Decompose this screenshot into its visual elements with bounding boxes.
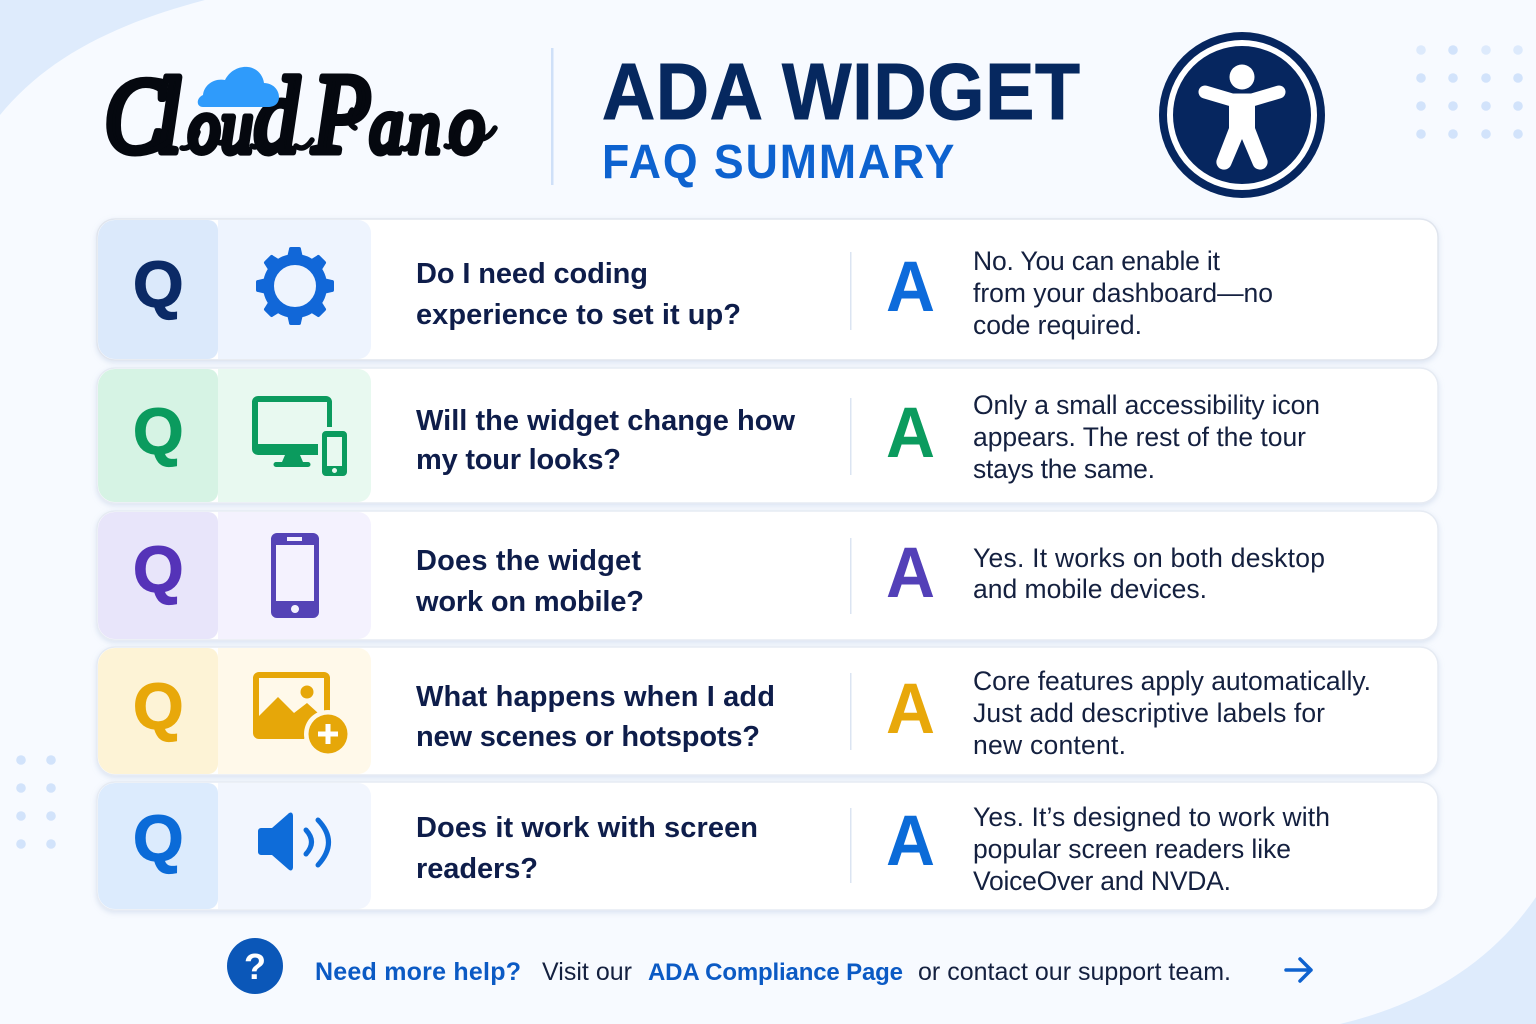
answer: Core features apply automatically. [973, 666, 1371, 696]
question [416, 405, 795, 476]
logo: CloudPano: u [221, 85, 253, 169]
title: ADA WIDGET [602, 47, 1080, 137]
answer: stays the same. [973, 454, 1155, 484]
icon: cloud [198, 67, 279, 107]
logo: CloudPano: o [188, 85, 220, 169]
panel: FAQ row 3 [97, 511, 1438, 640]
A badge: A [886, 248, 935, 327]
icon: mobile phone [271, 533, 319, 618]
icon: speaker [258, 813, 328, 870]
icon: gear [256, 247, 334, 325]
Q badge: Q [133, 802, 184, 874]
answer: VoiceOver and NVDA. [973, 866, 1231, 896]
answer [973, 543, 1325, 604]
A badge: A [886, 802, 935, 881]
logo: CloudPano [104, 50, 495, 177]
panel: FAQ row 1 [97, 219, 1438, 360]
A badge: A [886, 534, 935, 613]
footer [227, 938, 1311, 994]
icon: accessibility badge [1159, 32, 1325, 198]
Q badge: Q [133, 248, 184, 320]
question: Does the widget [416, 545, 641, 577]
answer: Just add descriptive labels for [973, 698, 1325, 728]
question: readers? [416, 853, 538, 885]
footer text: ADA Compliance Page [648, 959, 903, 986]
footer text: or contact our support team. [918, 958, 1231, 986]
logo: CloudPano: C [104, 56, 166, 176]
question: Will the widget change how [416, 405, 795, 437]
footer text [315, 958, 1231, 986]
panel: FAQ row 2 [97, 368, 1438, 503]
Q badge: Q [133, 670, 184, 742]
answer: Yes. It works on both desktop [973, 543, 1325, 573]
icon: help circle: ? [244, 946, 266, 987]
logo: CloudPano: n [408, 85, 440, 169]
footer text: Need more help? [315, 958, 521, 986]
answer [973, 390, 1320, 484]
subtitle: FAQ SUMMARY [602, 135, 955, 188]
Q badge: Q [133, 532, 184, 606]
question: work on mobile? [415, 586, 644, 618]
icon: monitor and phone [252, 396, 347, 476]
panel: FAQ row 5 [97, 782, 1438, 910]
answer: popular screen readers like [973, 834, 1291, 864]
answer: new content. [973, 730, 1126, 760]
question [416, 812, 758, 885]
logo: CloudPano: P [312, 50, 371, 177]
answer [973, 246, 1273, 340]
question: my tour looks? [416, 444, 621, 476]
logo: CloudPano: d [254, 56, 300, 176]
footer text: Visit our [542, 958, 632, 986]
icon: add image [253, 672, 352, 758]
panel: FAQ row 4 [97, 647, 1438, 775]
question: Does it work with screen [416, 812, 758, 844]
answer: Only a small accessibility icon [973, 390, 1320, 420]
icon: help circle [227, 938, 283, 994]
A badge: A [886, 670, 935, 749]
answer: No. You can enable it [973, 246, 1221, 276]
answer: appears. The rest of the tour [973, 422, 1306, 452]
answer [973, 802, 1330, 896]
question [416, 258, 741, 331]
question: Do I need coding [416, 258, 648, 290]
A badge: A [886, 394, 935, 473]
answer: and mobile devices. [973, 574, 1207, 604]
logo: CloudPano: a [370, 81, 403, 169]
answer: from your dashboard—no [973, 278, 1273, 308]
Q badge: Q [133, 394, 184, 468]
question [415, 545, 644, 618]
question: experience to set it up? [416, 299, 741, 331]
logo: CloudPano: l [156, 56, 181, 176]
answer: code required. [973, 310, 1142, 340]
answer: Yes. It’s designed to work with [973, 802, 1330, 832]
answer [973, 666, 1371, 760]
question: new scenes or hotspots? [416, 721, 760, 753]
question: What happens when I add [416, 681, 775, 713]
logo: CloudPano: o [449, 77, 485, 170]
title [602, 47, 1080, 188]
question [416, 681, 775, 753]
arrow [1286, 959, 1311, 981]
